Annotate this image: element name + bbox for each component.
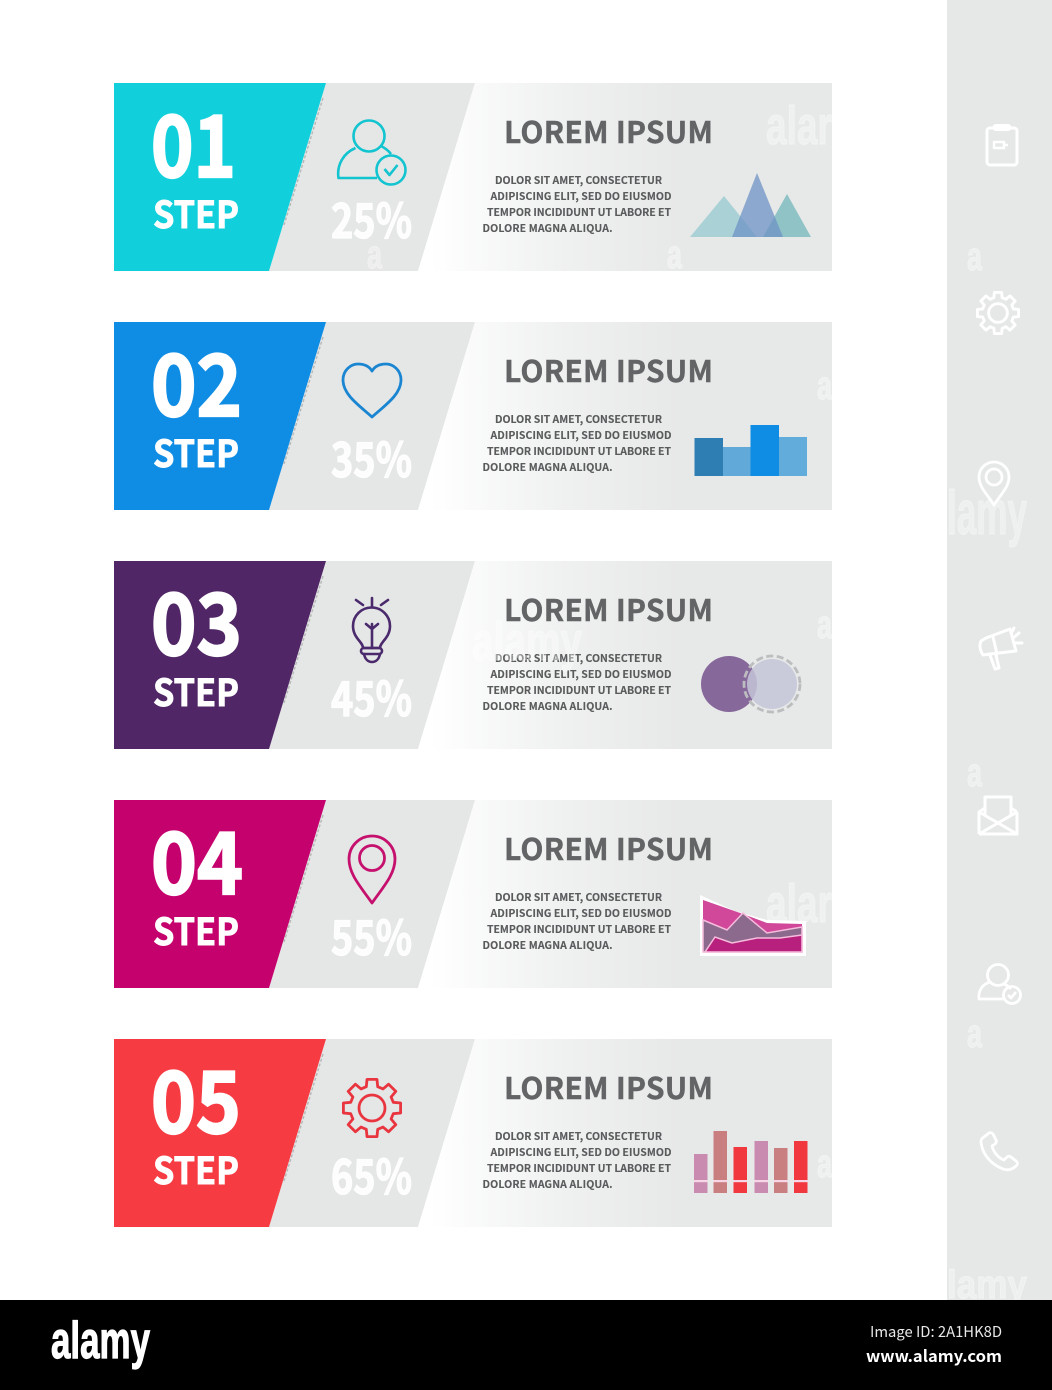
body text: DOLORE MAGNA ALIQUA. [482, 460, 612, 475]
icon: light bulb [353, 598, 390, 662]
watermark letters: a [367, 233, 383, 277]
watermark letters: alamy [472, 612, 582, 672]
body text: TEMPOR INCIDIDUNT UT LABORE ET [487, 1161, 671, 1176]
footer bar [0, 1300, 1052, 1390]
body text [482, 890, 672, 953]
body text: ADIPISCING ELIT, SED DO EIUSMOD [490, 189, 672, 204]
heading: LOREM IPSUM [504, 347, 713, 391]
icon: user check [979, 964, 1020, 1004]
body text: DOLOR SIT AMET, CONSECTETUR [495, 651, 662, 666]
chart: column bars [694, 1131, 808, 1193]
step number: 02 [151, 318, 242, 441]
watermark letters: a [667, 233, 683, 277]
image id: Image ID: 2A1HK8D [870, 1321, 1002, 1342]
panel: step colour block [114, 1039, 326, 1227]
icon: location pin [979, 462, 1009, 505]
body text [482, 651, 672, 714]
chart: bars [694, 425, 807, 476]
icon: gear [977, 292, 1019, 334]
watermark letters: alar [766, 874, 832, 934]
body text: TEMPOR INCIDIDUNT UT LABORE ET [487, 922, 671, 937]
heading: LOREM IPSUM [504, 825, 713, 869]
panel: step colour block [114, 83, 326, 271]
panel: text background [418, 83, 832, 271]
chart: stacked area [700, 895, 806, 956]
step number: 05 [151, 1035, 241, 1158]
percentage: 45% [331, 660, 412, 730]
panel: gray band [269, 1039, 475, 1227]
panel: gray band [269, 322, 475, 510]
row 3: step 03 [114, 557, 832, 749]
row 5: step 05 [114, 1035, 832, 1227]
step label: STEP [153, 185, 239, 239]
step number: 04 [151, 796, 243, 919]
body text [482, 412, 672, 475]
percentage: 55% [331, 899, 412, 969]
watermark letters: a [967, 1012, 983, 1056]
panel: text background [418, 800, 832, 988]
heading: LOREM IPSUM [504, 1064, 713, 1108]
heading: LOREM IPSUM [504, 108, 713, 152]
step label: STEP [153, 1141, 239, 1195]
icon: megaphone [980, 628, 1022, 669]
watermark letters: a [967, 751, 983, 795]
body text: TEMPOR INCIDIDUNT UT LABORE ET [487, 444, 671, 459]
panel: step colour block [114, 561, 326, 749]
panel: gray band [269, 800, 475, 988]
body text: ADIPISCING ELIT, SED DO EIUSMOD [490, 1145, 672, 1160]
percentage: 25% [331, 182, 412, 252]
website: www.alamy.com [866, 1343, 1002, 1367]
body text: DOLORE MAGNA ALIQUA. [482, 938, 612, 953]
panel: gray band [269, 561, 475, 749]
body text: TEMPOR INCIDIDUNT UT LABORE ET [487, 205, 671, 220]
step label: STEP [153, 424, 239, 478]
panel: gray band [269, 83, 475, 271]
panel: text background [418, 561, 832, 749]
step number: 01 [151, 79, 236, 202]
percentage: 65% [331, 1138, 412, 1208]
panel: step colour block [114, 800, 326, 988]
body text: DOLORE MAGNA ALIQUA. [482, 699, 612, 714]
body text [482, 1129, 672, 1192]
body text: DOLOR SIT AMET, CONSECTETUR [495, 412, 662, 427]
logo: alamy [51, 1312, 150, 1370]
body text: DOLOR SIT AMET, CONSECTETUR [495, 173, 662, 188]
watermark letters: alar [766, 96, 832, 156]
icon: clipboard [987, 126, 1017, 165]
body text: ADIPISCING ELIT, SED DO EIUSMOD [490, 906, 672, 921]
icon: envelope [979, 797, 1017, 834]
body text: ADIPISCING ELIT, SED DO EIUSMOD [490, 667, 672, 682]
body text: TEMPOR INCIDIDUNT UT LABORE ET [487, 683, 671, 698]
chart: overlapping circles [701, 656, 800, 712]
icon: phone [981, 1133, 1018, 1170]
chart: mountains [690, 173, 811, 237]
watermark letters: a [817, 603, 833, 647]
row 4: step 04 [114, 796, 832, 988]
icon: location pin [349, 836, 395, 903]
body text [482, 173, 672, 236]
percentage: 35% [331, 421, 412, 491]
row 1: step 01 [114, 79, 832, 271]
watermark letters: a [817, 364, 833, 408]
watermark letters: a [967, 235, 983, 279]
body text: DOLORE MAGNA ALIQUA. [482, 1177, 612, 1192]
icon: heart [343, 364, 401, 417]
step label: STEP [153, 663, 239, 717]
watermark letters: a [817, 1142, 833, 1186]
watermark letters: lamy [947, 1263, 1028, 1307]
body text: DOLORE MAGNA ALIQUA. [482, 221, 612, 236]
watermark letters [367, 96, 1028, 1307]
panel: icon sidebar [947, 0, 1052, 1300]
step number: 03 [151, 557, 242, 680]
heading: LOREM IPSUM [504, 586, 713, 630]
icon: user check [338, 120, 406, 184]
row 2: step 02 [114, 318, 832, 510]
body text: DOLOR SIT AMET, CONSECTETUR [495, 1129, 662, 1144]
panel: text background [418, 1039, 832, 1227]
step label: STEP [153, 902, 239, 956]
panel: step colour block [114, 322, 326, 510]
body text: ADIPISCING ELIT, SED DO EIUSMOD [490, 428, 672, 443]
body text: DOLOR SIT AMET, CONSECTETUR [495, 890, 662, 905]
panel: text background [418, 322, 832, 510]
icon: gear [343, 1079, 401, 1137]
